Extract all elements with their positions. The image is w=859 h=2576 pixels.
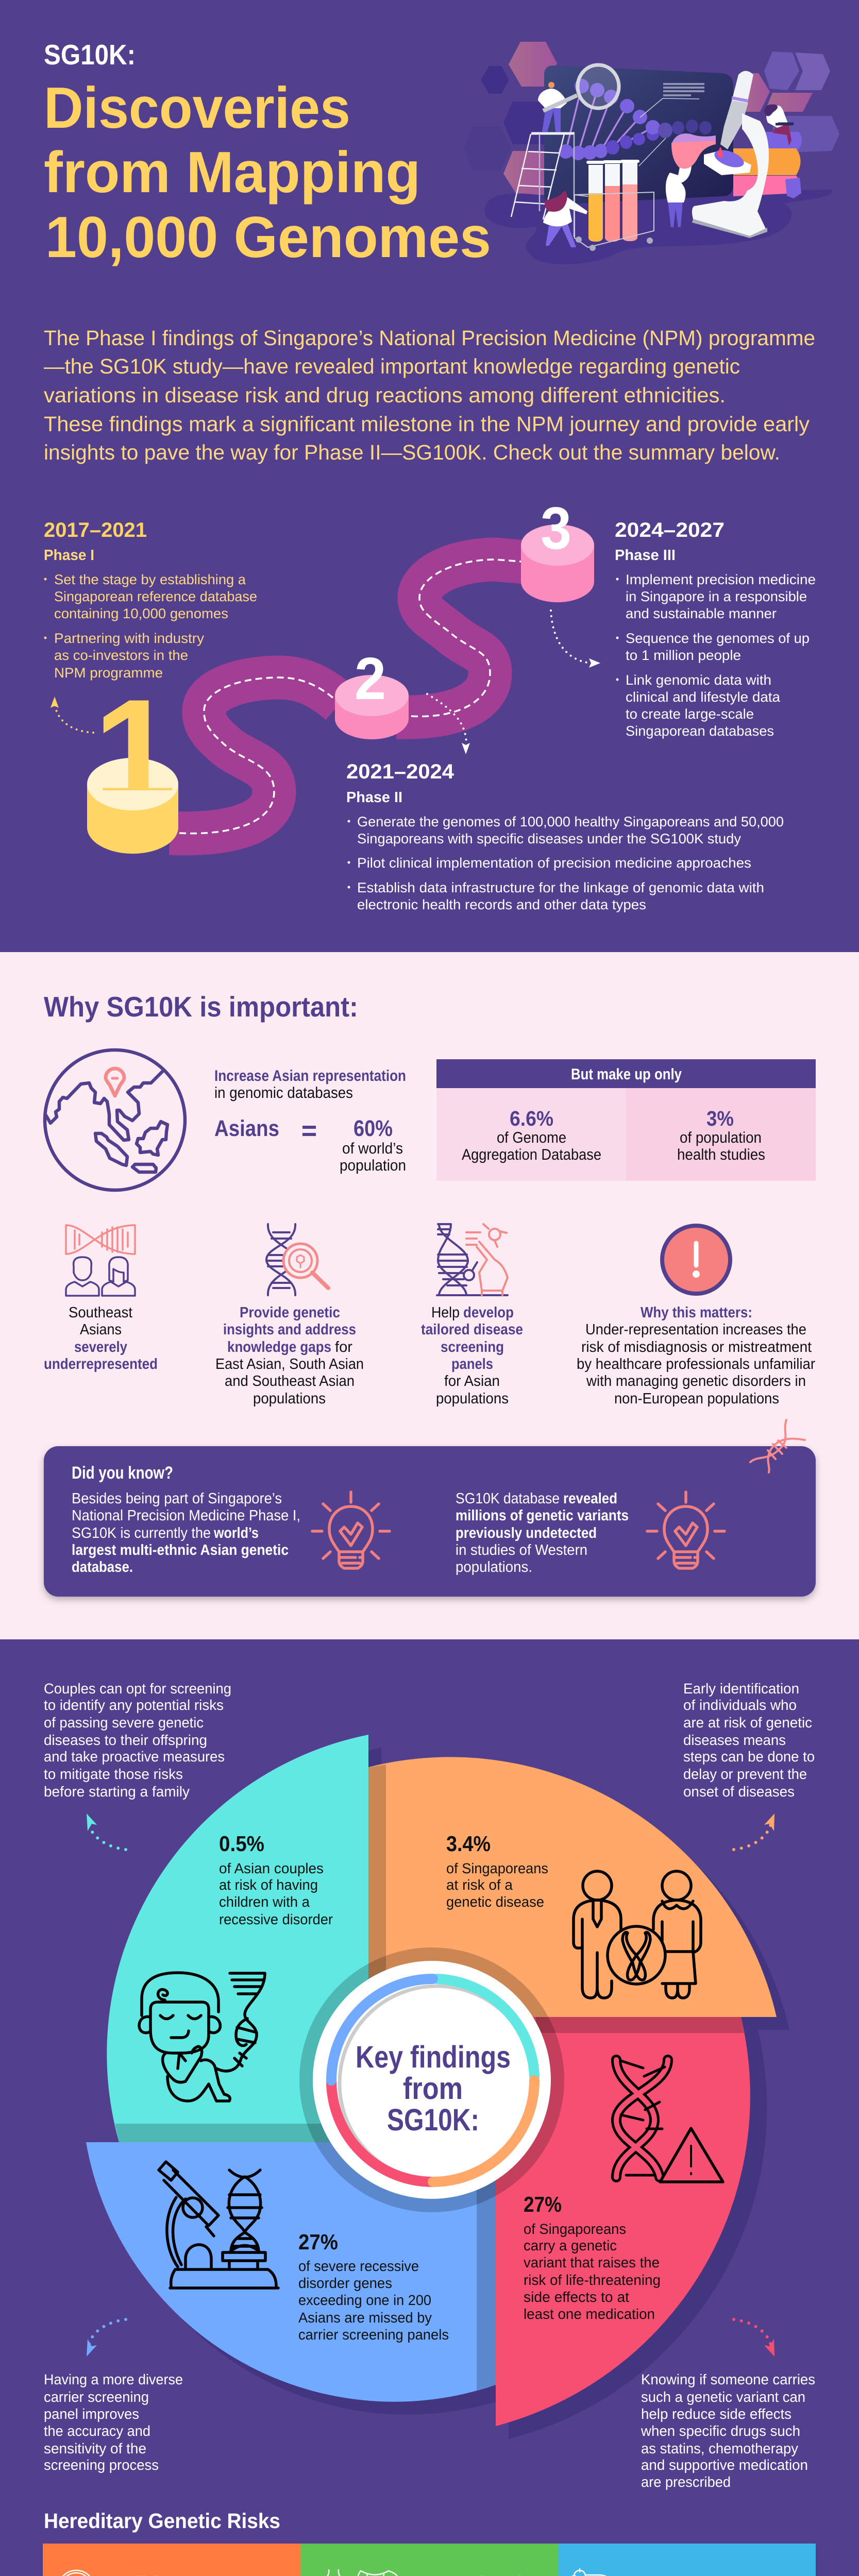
stat: increase Asian representation: in genomic databases (214, 1084, 353, 1101)
text: couples can opt for screening: Couples can opt for screening (44, 1681, 231, 1697)
segment: orange (368, 1757, 777, 2017)
text: 0.5% stat: at risk of having (219, 1877, 318, 1893)
text: 27% red stat: 27% (524, 2192, 562, 2216)
text: 0.5% stat: children with a (219, 1894, 310, 1910)
segment: blue (86, 2142, 496, 2402)
text: early identification (683, 1681, 815, 1800)
panel: did you know (first): database. (72, 1559, 133, 1575)
panel: hereditary risks table (43, 2544, 816, 2576)
title: SG10K: (44, 39, 136, 71)
table: but make up only: 3% (706, 1107, 734, 1130)
panel: did you know (first): Besides being part of Singapore’s (72, 1490, 282, 1507)
text: Southeast Asians severely underrepresented: Asians (80, 1321, 122, 1338)
phase III text: to create large-scale (626, 706, 754, 722)
panel: did you know (first): previously undetected (456, 1525, 597, 1541)
icon: lightbulb left (312, 1492, 390, 1568)
phase III text: Implement precision medicine (626, 572, 816, 587)
phase II text: 2021–2024 (346, 760, 454, 783)
intro paragraph (44, 326, 815, 464)
phase II text: Establish data infrastructure for the linkage of genomic data with (357, 880, 764, 895)
text: knowing if someone carries: and supportive medication (641, 2457, 808, 2473)
stat: increase Asian representation: 60% (353, 1116, 393, 1141)
phase II text: electronic health records and other data types (357, 897, 646, 912)
panel: did you know (first): revealed (563, 1490, 617, 1507)
panel: did you know (first): National Precision Medicine Phase I, (72, 1507, 300, 1524)
text: provide genetic insights: knowledge gaps (227, 1339, 331, 1355)
text: couples can opt for screening (44, 1681, 231, 1800)
text: help develop tailored disease screening panels: for Asian (444, 1373, 500, 1389)
phase I text (44, 519, 257, 681)
text: provide genetic insights: insights and address (223, 1321, 356, 1338)
text: 0.5% stat: 0.5% (219, 1832, 264, 1856)
text: more diverse carrier screening (44, 2371, 183, 2473)
text: why this matters: Under-representation increases the (585, 1321, 806, 1338)
text: early identification: of individuals who (683, 1697, 797, 1713)
text: couples can opt for screening: of passing severe genetic (44, 1715, 204, 1731)
text: 3.4% stat (446, 1832, 548, 1910)
icon: globe with Southeast Asia map and pin (45, 1050, 185, 1190)
title: key findings from SG10K: from (403, 2071, 463, 2106)
text: more diverse carrier screening: panel improves (44, 2406, 139, 2422)
arrow: milestone 3 to phase III (551, 611, 600, 668)
panel: did you know (first) (44, 1420, 816, 1597)
text: early identification: delay or prevent the (683, 1766, 807, 1782)
text: 3.4% stat: at risk of a (446, 1877, 513, 1893)
title: 10,000 Genomes (45, 205, 491, 269)
phase III text: 2024–2027 (615, 519, 725, 541)
text: Southeast Asians severely underrepresented: underrepresented (44, 1356, 158, 1372)
text: why this matters: non-European populations (614, 1391, 779, 1407)
arrow: teal dotted (87, 1814, 126, 1850)
icon: DNA with magnifier (266, 1224, 328, 1295)
text: couples can opt for screening: to identify any potential risks (44, 1697, 224, 1713)
text: couples can opt for screening: to mitigate those risks (44, 1766, 183, 1782)
text: 27% blue stat (298, 2230, 449, 2343)
stat: increase Asian representation: Increase Asian representation (214, 1067, 406, 1084)
panel: did you know (first): SG10K database (456, 1490, 560, 1507)
text: more diverse carrier screening: Having a more diverse (44, 2371, 183, 2387)
text: help develop tailored disease screening panels (421, 1304, 523, 1407)
timeline road (170, 560, 531, 834)
stat: increase Asian representation: population (340, 1157, 406, 1174)
milestone 3 cylinder (521, 495, 594, 602)
phase II text (346, 760, 784, 912)
icon: baby with DNA (139, 1973, 265, 2101)
text: 27% red stat: carry a genetic (524, 2238, 617, 2253)
text: knowing if someone carries (641, 2371, 815, 2490)
text: 27% red stat: side effects to at (524, 2289, 629, 2305)
text: 27% blue stat: exceeding one in 200 (298, 2292, 431, 2308)
arrow: orange dotted (734, 1814, 774, 1850)
phase III text: Sequence the genomes of up (626, 631, 810, 646)
text: 3.4% stat: genetic disease (446, 1894, 544, 1910)
text: provide genetic insights: East Asian, South Asian (215, 1356, 364, 1372)
text: 27% blue stat: carrier screening panels (298, 2327, 449, 2343)
text: 27% red stat: of Singaporeans (524, 2221, 626, 2237)
text: 3.4% stat: of Singaporeans (446, 1860, 548, 1876)
text: knowing if someone carries: Knowing if someone carries (641, 2371, 815, 2387)
text: couples can opt for screening: before starting a family (44, 1784, 190, 1800)
phase I text: 2017–2021 (44, 519, 147, 541)
hero illustration: genome research lab (464, 42, 839, 264)
text: early identification: steps can be done to (683, 1749, 815, 1765)
text: more diverse carrier screening: the accuracy and (44, 2423, 150, 2439)
icon: DNA with warning (616, 2060, 723, 2182)
text: Southeast Asians severely underrepresented (44, 1304, 158, 1372)
text: help develop tailored disease screening panels: Help (431, 1304, 460, 1321)
stat: increase Asian representation: of world’s (342, 1140, 403, 1157)
phase II text: Phase II (346, 789, 402, 806)
milestone 2 cylinder (335, 645, 409, 739)
phase I text: NPM programme (54, 665, 163, 681)
text: early identification: diseases means (683, 1732, 786, 1748)
panel: did you know (first): millions of genetic variants (456, 1507, 629, 1524)
phase I text: Singaporean reference database (54, 589, 257, 604)
icon: microscope and DNA (159, 2162, 278, 2288)
text: why this matters (577, 1304, 815, 1407)
phase I text: Set the stage by establishing a (54, 572, 246, 587)
panel: did you know (first): world’s (213, 1525, 259, 1541)
text: why this matters: with managing genetic disorders in (586, 1373, 806, 1389)
text: knowing if someone carries: such a genetic variant can (641, 2389, 805, 2405)
arrow: milestone 2 to phase II (427, 694, 470, 754)
text: help develop tailored disease screening panels: screening (441, 1339, 504, 1355)
table: but make up only: health studies (677, 1146, 765, 1163)
table: but make up only: of population (680, 1129, 762, 1146)
text: knowing if someone carries: as statins, chemotherapy (641, 2441, 798, 2456)
arrow: blue dotted (87, 2319, 126, 2357)
text: why this matters: by healthcare professionals unfamiliar (577, 1356, 815, 1372)
title (44, 39, 491, 269)
text: provide genetic insights: Provide genetic (240, 1304, 340, 1321)
text: Southeast Asians severely underrepresented: Southeast (69, 1304, 132, 1321)
table: but make up only: But make up only (571, 1066, 682, 1083)
phase III text: clinical and lifestyle data (626, 689, 781, 705)
text: 27% blue stat: Asians are missed by (298, 2310, 432, 2326)
phase I text: Partnering with industry (54, 631, 205, 646)
intro paragraph: The Phase I findings of Singapore’s National Precision Medicine (NPM) programme (44, 326, 815, 350)
icon: Southeast Asians under DNA (66, 1225, 135, 1296)
text: 3.4% stat: 3.4% (446, 1832, 491, 1856)
text: 27% blue stat: 27% (298, 2230, 338, 2254)
phase III text (615, 519, 816, 739)
text: more diverse carrier screening: screening process (44, 2457, 159, 2473)
text: couples can opt for screening: and take proactive measures (44, 1749, 225, 1765)
chart: key findings wheel (86, 1735, 789, 2439)
text: 0.5% stat (219, 1832, 333, 1927)
text: help develop tailored disease screening panels: panels (451, 1356, 493, 1372)
icon: alert circle (662, 1226, 730, 1294)
panel: did you know (first): populations. (456, 1559, 532, 1575)
heading: hereditary genetic risks: Hereditary Genetic Risks (44, 2509, 280, 2533)
text: provide genetic insights: for (335, 1339, 352, 1355)
panel: did you know (first): Did you know? (72, 1463, 173, 1483)
table: but make up only: Aggregation Database (462, 1146, 601, 1163)
arrow: red dotted (734, 2319, 774, 2357)
phase III text: in Singapore in a responsible (626, 589, 807, 604)
heading: why SG10K is important: Why SG10K is important: (44, 991, 358, 1023)
icon: DNA strand on panel corner (750, 1420, 805, 1472)
text: provide genetic insights (215, 1304, 364, 1407)
title: Discoveries (44, 75, 350, 140)
text: 0.5% stat: recessive disorder (219, 1911, 333, 1927)
text: help develop tailored disease screening panels: populations (436, 1391, 509, 1407)
text: provide genetic insights: and Southeast Asian (225, 1373, 355, 1389)
phase II text: Generate the genomes of 100,000 healthy Singaporeans and 50,000 (357, 814, 784, 829)
milestone 3 cylinder: 3 (541, 495, 571, 562)
arrow: milestone 1 to phase I (50, 697, 93, 733)
text: Southeast Asians severely underrepresented: severely (74, 1339, 127, 1355)
header: Lynch syndrome (558, 2544, 816, 2576)
milestone 1 cylinder (87, 701, 178, 854)
text: help develop tailored disease screening panels: develop (463, 1304, 514, 1321)
intro paragraph: variations in disease risk and drug reactions among different ethnicities. (44, 383, 726, 407)
phase II text: Pilot clinical implementation of precision medicine approaches (357, 855, 751, 871)
text: knowing if someone carries: are prescribed (641, 2474, 731, 2490)
text: 27% red stat: risk of life-threatening (524, 2272, 661, 2288)
phase I text: as co-investors in the (54, 648, 188, 663)
text: why this matters: risk of misdiagnosis or mistreatment (581, 1339, 812, 1355)
title: key findings from SG10K: SG10K: (387, 2103, 479, 2137)
header: familial hypercholesterolemia (43, 2544, 300, 2576)
text: 27% blue stat: disorder genes (298, 2275, 392, 2291)
phase III text: Singaporean databases (626, 723, 774, 739)
table: but make up only: of Genome (497, 1129, 566, 1146)
intro paragraph: insights to pave the way for Phase II—SG100K. Check out the summary below. (44, 440, 780, 464)
icon: couple with chromosome (574, 1871, 701, 1998)
text: 27% blue stat: of severe recessive (298, 2258, 419, 2274)
text: knowing if someone carries: help reduce side effects (641, 2406, 791, 2422)
text: couples can opt for screening: diseases to their offspring (44, 1732, 207, 1748)
panel: did you know (first): in studies of Western (456, 1542, 587, 1558)
text: 0.5% stat: of Asian couples (219, 1860, 324, 1876)
panel: did you know (first): SG10K is currently the (72, 1525, 211, 1541)
text: 27% red stat: least one medication (524, 2306, 655, 2322)
stat: increase Asian representation: Asians (214, 1116, 279, 1141)
table: but make up only: 6.6% (510, 1107, 553, 1130)
text: 27% red stat (524, 2192, 661, 2322)
phase III text: and sustainable manner (626, 606, 777, 621)
text: early identification: onset of diseases (683, 1784, 795, 1800)
icon: DNA, hand and pathogen (437, 1224, 508, 1295)
title: key findings from SG10K (356, 2040, 511, 2137)
segment: teal (107, 1735, 368, 2142)
text: why this matters: Why this matters: (641, 1304, 752, 1321)
phase III text: to 1 million people (626, 648, 741, 663)
milestone 1 cylinder: 1 (93, 668, 176, 835)
text: early identification: are at risk of genetic (683, 1715, 812, 1731)
stat: increase Asian representation (214, 1067, 406, 1174)
text: more diverse carrier screening: sensitivity of the (44, 2441, 146, 2456)
phase II text: Singaporeans with specific diseases under the SG100K study (357, 831, 742, 846)
text: knowing if someone carries: when specific drugs such (641, 2423, 800, 2439)
panel: did you know (first): largest multi-ethnic Asian genetic (72, 1542, 289, 1558)
text: more diverse carrier screening: carrier screening (44, 2389, 149, 2405)
intro paragraph: —the SG10K study—have revealed important knowledge regarding genetic (44, 354, 740, 378)
phase III text: Link genomic data with (626, 672, 771, 688)
phase I text: containing 10,000 genomes (54, 606, 228, 621)
segment: red (496, 2017, 750, 2426)
text: help develop tailored disease screening panels: tailored disease (421, 1321, 523, 1338)
table: but make up only (436, 1059, 816, 1181)
text: 27% red stat: variant that raises the (524, 2255, 660, 2270)
text: provide genetic insights: populations (253, 1391, 326, 1407)
phase III text: Phase III (615, 547, 676, 564)
title: key findings from SG10K: Key findings (356, 2040, 511, 2074)
milestone 2 cylinder: 2 (355, 645, 386, 712)
phase I text: Phase I (44, 547, 94, 564)
title: from Mapping (44, 140, 420, 205)
icon: lightbulb right (647, 1492, 725, 1568)
intro paragraph: These findings mark a significant milestone in the NPM journey and provide early (44, 412, 810, 436)
header: breast and ovarian cancer (300, 2544, 558, 2576)
text: early identification: Early identification (683, 1681, 799, 1697)
